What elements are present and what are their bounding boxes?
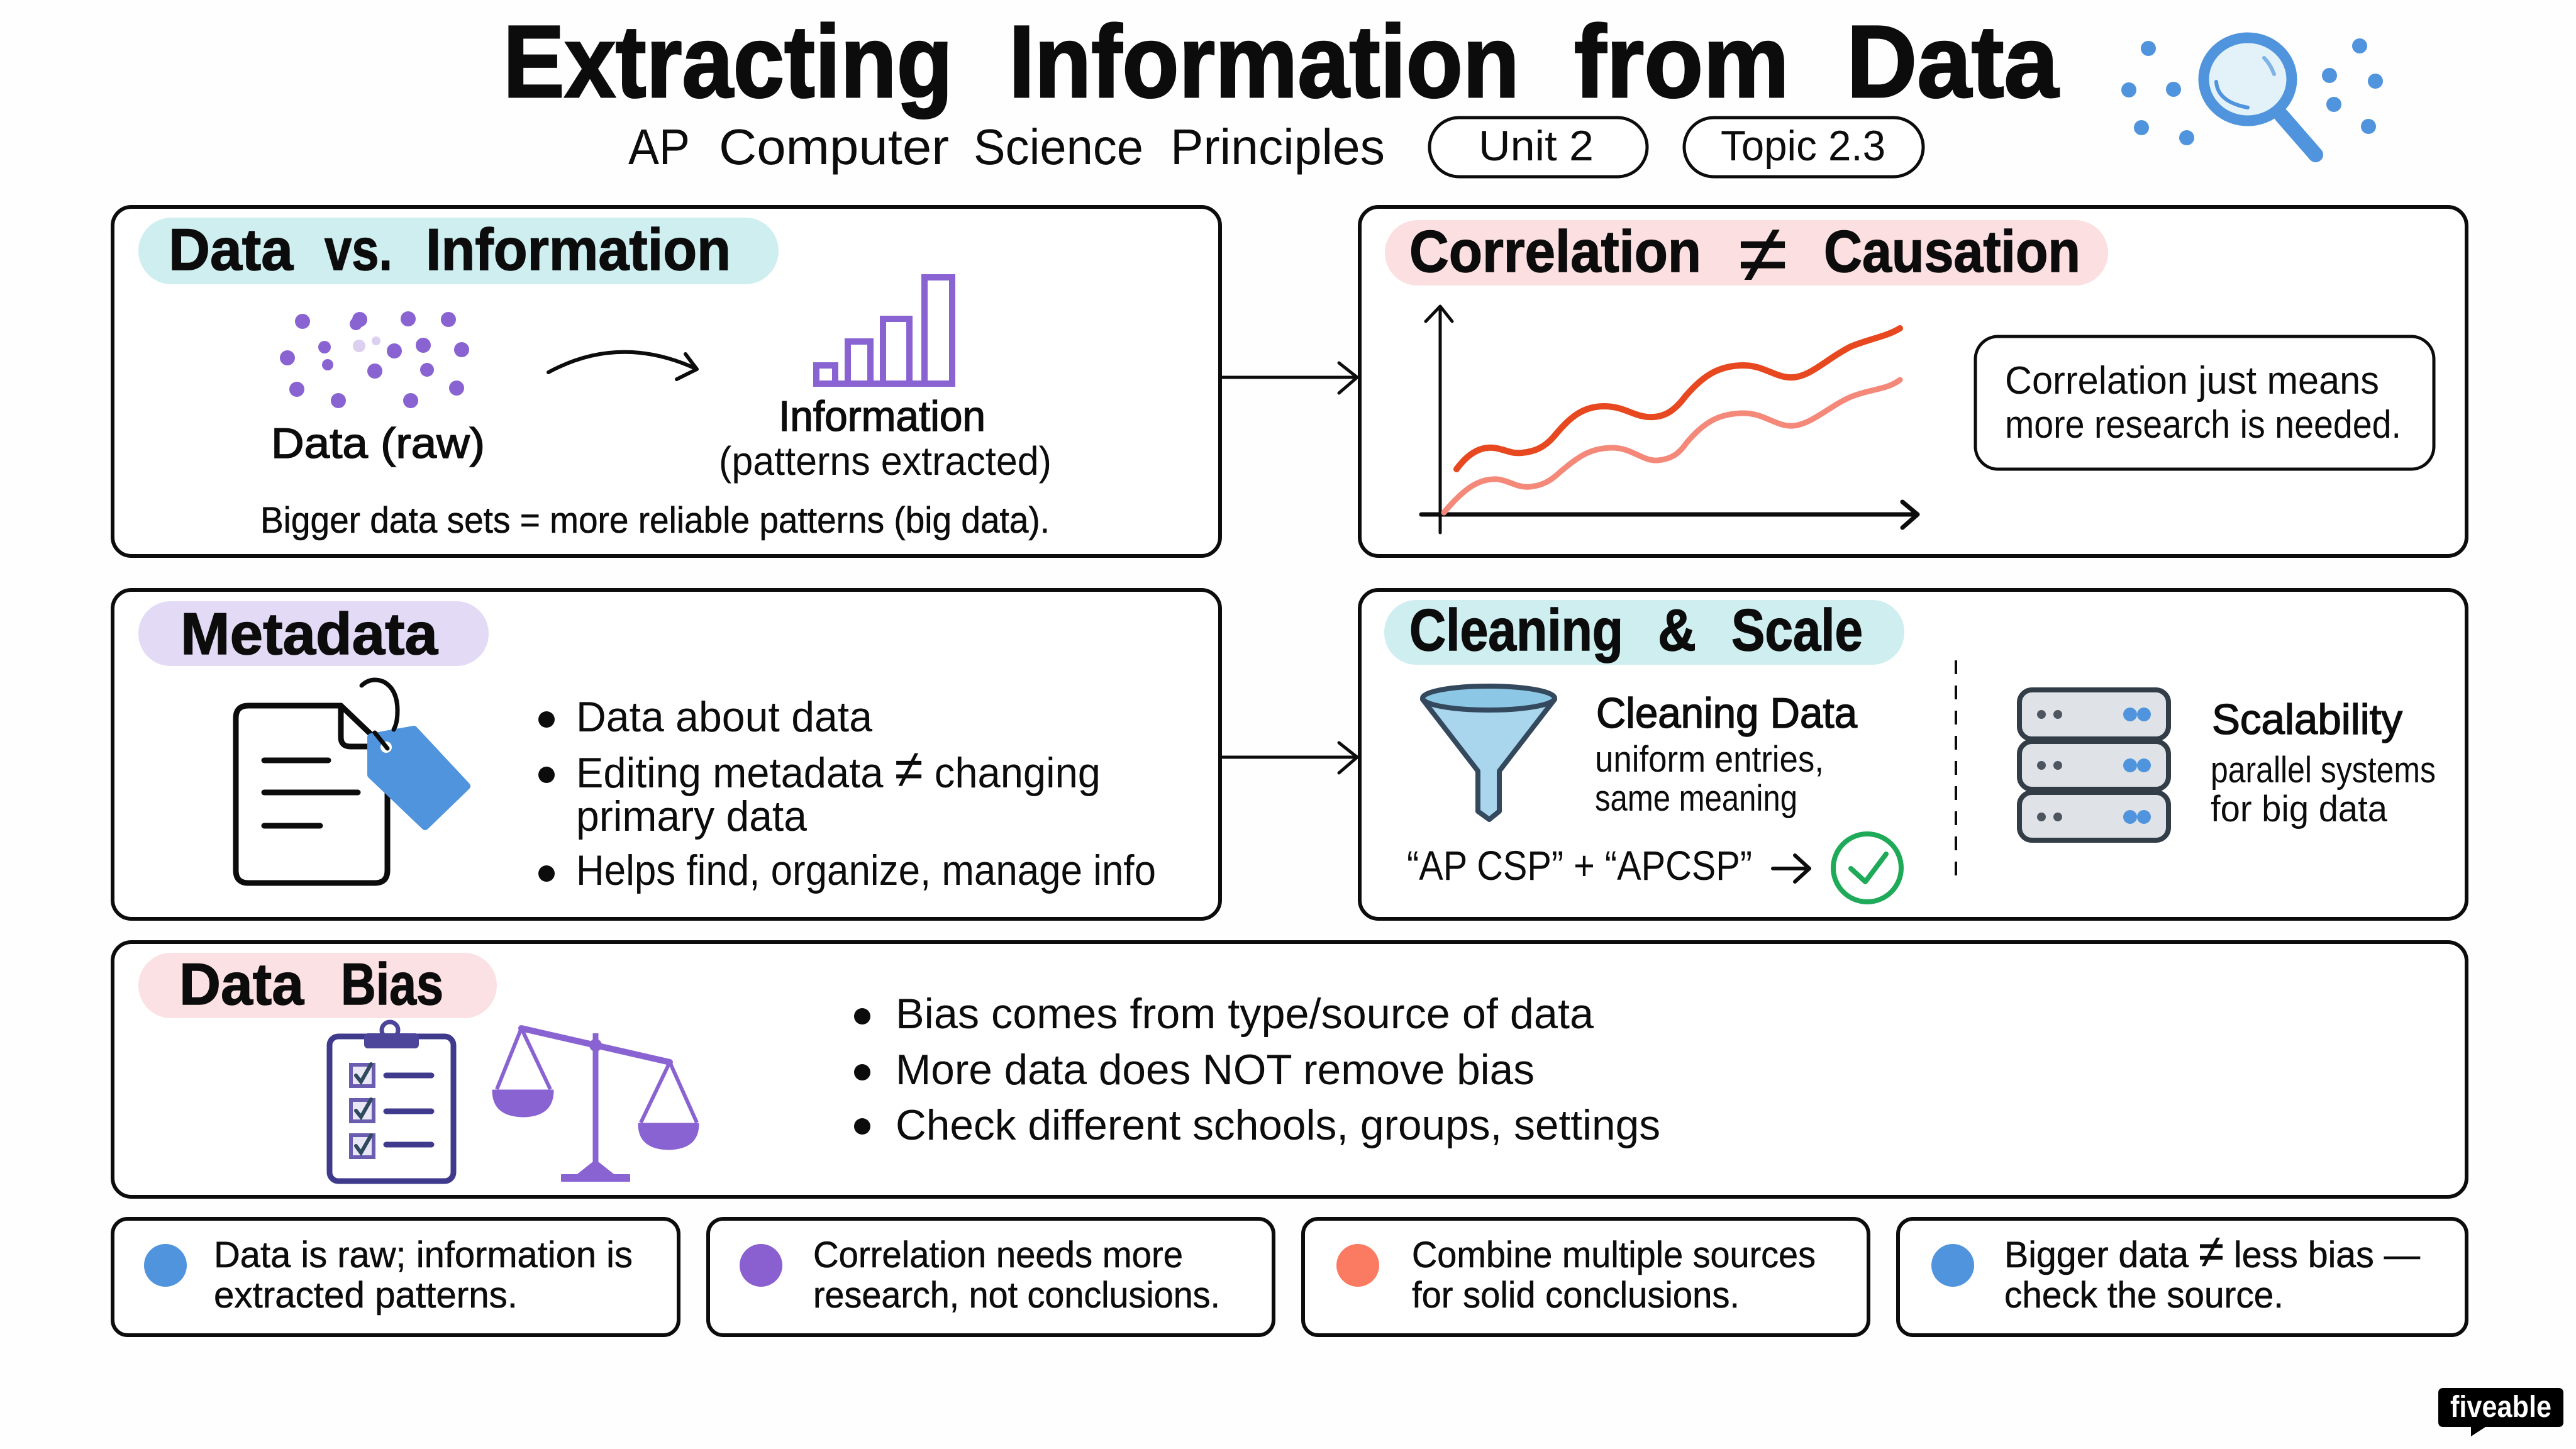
bullet list: bias points: Bias comes from type/source of data [896, 990, 1594, 1038]
badge: Unit 2 [1430, 118, 1647, 177]
heading: Correlation ≠ Causation: Correlation [1409, 218, 1701, 284]
badge: Topic 2.3 [1684, 118, 1923, 177]
panel: Metadata [113, 590, 1220, 919]
heading: Correlation ≠ Causation: ≠ [1738, 208, 1787, 299]
example: merging AP CSP and APCSP: “AP CSP” + “APCSP” [1407, 842, 1752, 889]
arrow: middle connector [1220, 743, 1357, 773]
text: Scalability: Scalability [2212, 696, 2402, 743]
heading: Metadata: Metadata [180, 601, 438, 667]
subtitle: Science [974, 119, 1143, 175]
takeaway card: combine sources [1303, 1219, 1868, 1335]
heading: Correlation ≠ Causation [1385, 208, 2108, 299]
heading: Cleaning & Scale [1384, 597, 1904, 665]
heading: Data vs. Information: Information [426, 216, 731, 282]
heading: Data Bias [138, 951, 497, 1018]
bullet list: metadata points: Helps find, organize, manage info [576, 847, 1156, 894]
callout: correlation meaning: Correlation just means [2005, 359, 2379, 402]
panel: Cleaning & Scale [1360, 590, 2467, 919]
title: from [1574, 4, 1789, 119]
title [503, 4, 2059, 119]
logo: fiveable: fiveable [2450, 1391, 2551, 1424]
panel: Data Bias [113, 942, 2467, 1197]
heading: Data vs. Information: vs. [325, 216, 392, 282]
text: Scalability [2211, 696, 2436, 830]
bullet list: metadata points: Data about data [576, 693, 872, 741]
label: patterns extracted: (patterns extracted) [719, 438, 1052, 484]
subtitle: Principles [1170, 119, 1385, 175]
icon: scattered raw data dots [280, 311, 469, 408]
label: Data (raw): Data (raw) [271, 419, 485, 467]
subtitle [628, 119, 1385, 175]
panel: Data vs. Information [113, 207, 1220, 556]
takeaway card: data is raw: Data is raw; information is [214, 1235, 633, 1275]
heading: Cleaning & Scale: Cleaning [1409, 597, 1623, 663]
callout: correlation meaning [1975, 336, 2434, 469]
text: Scalability: parallel systems [2211, 750, 2436, 791]
heading: Cleaning & Scale: & [1658, 597, 1696, 663]
note: bigger data sets: Bigger data sets = more reliable patterns (big data). [260, 500, 1050, 541]
bullet list: metadata points: Editing metadata ≠ changing [576, 739, 1101, 799]
bullet list: bias points: Check different schools, groups, settings [896, 1101, 1660, 1149]
heading: Data Bias: Bias [341, 951, 443, 1017]
takeaway card: correlation needs research: research, not conclusions. [813, 1275, 1220, 1316]
bullet list: metadata points [538, 693, 1156, 894]
arrow: data to information [548, 352, 697, 379]
takeaway card: correlation needs research: Correlation needs more [813, 1235, 1183, 1275]
text: Cleaning Data: Cleaning Data [1596, 689, 1857, 737]
heading: Data Bias: Data [179, 951, 304, 1017]
icon: balance scale [493, 1028, 698, 1181]
takeaway card: bigger data [1898, 1219, 2467, 1335]
heading: Cleaning & Scale: Scale [1731, 597, 1863, 663]
logo: fiveable [2438, 1388, 2563, 1436]
text: Cleaning Data: uniform entries, [1595, 739, 1824, 780]
bullet list: bias points: More data does NOT remove bias [896, 1046, 1535, 1094]
icon: green check circle [1833, 834, 1901, 902]
subtitle: Computer [719, 119, 949, 175]
icon: bar chart of extracted patterns [813, 277, 955, 384]
takeaway card: combine sources: for solid conclusions. [1412, 1275, 1740, 1316]
icon: document with blue tag [236, 680, 467, 883]
heading: Data vs. Information: Data [169, 216, 294, 282]
icon: server stack [2019, 690, 2168, 840]
text: Cleaning Data [1595, 689, 1857, 819]
chart: two correlated trend lines [1421, 306, 1918, 533]
bullet list: metadata points: primary data [576, 792, 807, 840]
takeaway card: correlation needs research [708, 1219, 1274, 1335]
bullet list: bias points [854, 990, 1660, 1149]
takeaway card: bigger data: Bigger data ≠ less bias — [2004, 1225, 2420, 1277]
text: Scalability: for big data [2211, 789, 2388, 830]
icon: magnifying glass with data dots [2121, 38, 2383, 155]
text: Cleaning Data: same meaning [1595, 778, 1797, 819]
arrow: top connector [1220, 363, 1357, 393]
icon: clipboard checklist [330, 1022, 453, 1181]
takeaway card: bigger data: check the source. [2004, 1275, 2284, 1316]
takeaway card: data is raw [113, 1219, 679, 1335]
label: Information: Information [779, 392, 985, 440]
badge: Unit 2: Unit 2 [1479, 122, 1594, 170]
title: Data [1846, 4, 2059, 119]
callout: correlation meaning: more research is needed. [2005, 403, 2401, 447]
badge: Topic 2.3: Topic 2.3 [1721, 122, 1885, 170]
takeaway card: data is raw: extracted patterns. [214, 1275, 518, 1316]
panel: Correlation ≠ Causation [1360, 207, 2467, 556]
heading: Data vs. Information [138, 216, 779, 284]
subtitle: AP [628, 119, 690, 175]
icon: funnel [1423, 686, 1555, 819]
heading: Correlation ≠ Causation: Causation [1824, 218, 2080, 284]
title: Information [1009, 4, 1519, 119]
title: Extracting [503, 4, 953, 119]
takeaway card: combine sources: Combine multiple sources [1412, 1235, 1816, 1275]
